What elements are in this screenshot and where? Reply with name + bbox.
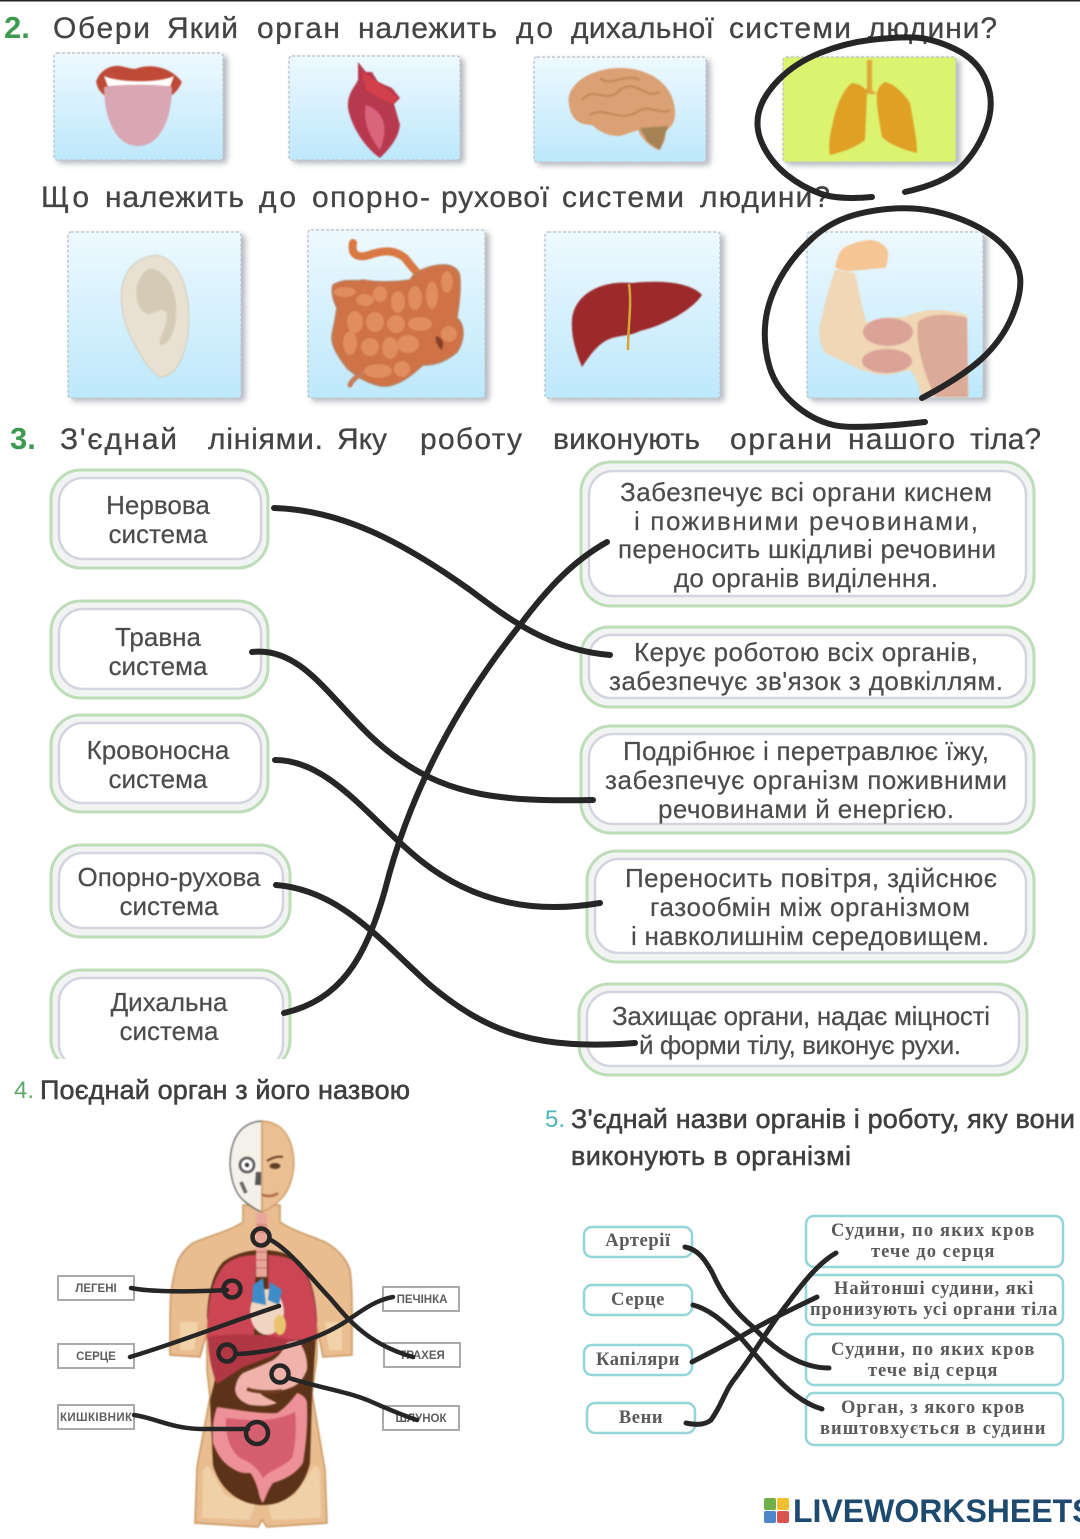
stomach bbox=[235, 1341, 307, 1406]
label: trachea bbox=[384, 1343, 460, 1367]
hip highlight bbox=[202, 1465, 321, 1520]
box: nervous system bbox=[51, 470, 268, 568]
box: nervous function: забезпечує зв'язок з довкіллям. bbox=[609, 666, 1003, 696]
box: heart bbox=[584, 1285, 692, 1315]
box: arteries definition bbox=[806, 1334, 1063, 1385]
hand-drawn matching lines: question 3 bbox=[252, 508, 635, 1045]
heading: question 2: дихальної bbox=[571, 12, 715, 45]
heading: question 2 part 2: рухової bbox=[441, 181, 550, 214]
trachea bbox=[256, 1213, 267, 1277]
box: heart definition: Орган, з якого кров bbox=[841, 1398, 1025, 1418]
heading: question 2: Який bbox=[167, 12, 238, 45]
heading: question 3 bbox=[10, 421, 1041, 456]
box: arteries definition: Судини, по яких кров bbox=[831, 1340, 1035, 1360]
box: nervous system: система bbox=[109, 519, 208, 549]
panel: functions column, question 5 bbox=[806, 1216, 1063, 1445]
heading: question 2 part 2: до bbox=[259, 181, 296, 214]
box: musculoskeletal system: Опорно-рухова bbox=[77, 862, 261, 892]
box: circulation function: Забезпечує всі органи киснем bbox=[620, 477, 992, 507]
box: digestive function: Подрібнює і перетравлює їжу, bbox=[623, 736, 989, 766]
heading: question 2: Обери bbox=[53, 12, 150, 45]
box: circulation function: до органів виділення. bbox=[674, 563, 938, 593]
heading: question 5: 5. bbox=[545, 1106, 565, 1133]
heading: question 3: роботу bbox=[420, 423, 522, 456]
heading: question 2 part 2: опорно- bbox=[312, 181, 430, 214]
box: nervous function: Керує роботою всіх органів, bbox=[634, 637, 978, 667]
box: circulation function bbox=[581, 462, 1034, 606]
card: lungs bbox=[783, 57, 956, 162]
box: veins: Вени bbox=[619, 1408, 663, 1428]
heading: question 4: 4. bbox=[14, 1077, 34, 1104]
box: nervous function bbox=[581, 627, 1034, 707]
box: arteries definition: тече від серця bbox=[868, 1361, 998, 1381]
box: nervous system: Нервова bbox=[106, 490, 210, 520]
label: intestine bbox=[58, 1405, 134, 1429]
heading: question 2: належить bbox=[358, 12, 497, 45]
heading: question 2: 2. bbox=[4, 10, 30, 45]
heading: question 2: системи bbox=[729, 12, 851, 45]
box: digestive function: речовинами й енергією. bbox=[658, 794, 954, 824]
card: tongue bbox=[54, 53, 223, 160]
heading: question 3: З'єднай bbox=[60, 423, 177, 456]
heading: question 2 part 2: системи bbox=[562, 181, 684, 214]
card: liver bbox=[545, 232, 720, 398]
box: circulatory system: система bbox=[109, 764, 208, 794]
hand-drawn lines: question 4 bbox=[130, 1228, 417, 1444]
box: heart definition bbox=[806, 1393, 1063, 1445]
heading: question 2 part 2: належить bbox=[105, 181, 244, 214]
heading: question 5: З'єднай назви органів і роботу, яку вони bbox=[571, 1104, 1075, 1134]
heading: question 3: тіла? bbox=[970, 423, 1041, 456]
label: heart: СЕРЦЕ bbox=[76, 1351, 116, 1363]
body silhouette bbox=[170, 1205, 352, 1527]
box: musculoskeletal system: система bbox=[120, 891, 219, 921]
box: circulatory system bbox=[51, 715, 268, 812]
box: musculoskeletal function bbox=[579, 984, 1027, 1075]
panel: organ cards row 1 bbox=[54, 53, 956, 162]
illustration: human body anatomy bbox=[170, 1121, 352, 1527]
label: liver: ПЕЧІНКА bbox=[397, 1294, 447, 1306]
box: musculoskeletal function: Захищає органи, надає міцності bbox=[612, 1001, 990, 1031]
box: respiratory system: система bbox=[120, 1016, 219, 1046]
logo mark bbox=[764, 1498, 789, 1523]
liver bbox=[208, 1334, 292, 1384]
heading: question 2 part 2 bbox=[41, 181, 830, 214]
box: veins definition: Судини, по яких кров bbox=[831, 1221, 1035, 1241]
body cavity bbox=[207, 1250, 317, 1505]
box: veins bbox=[587, 1403, 695, 1433]
box: respiratory system bbox=[40, 970, 300, 1073]
hand-drawn circle: lungs answer bbox=[757, 37, 991, 198]
heading: question 3: нашого bbox=[848, 423, 955, 456]
label: stomach bbox=[383, 1406, 459, 1430]
box: musculoskeletal system bbox=[51, 845, 290, 937]
heading: question 3: 3. bbox=[10, 421, 36, 456]
heading: question 2 bbox=[4, 10, 997, 45]
box: respiratory system: Дихальна bbox=[111, 987, 228, 1017]
box: capillaries: Капіляри bbox=[596, 1350, 680, 1370]
box: arteries bbox=[584, 1227, 692, 1257]
box: respiratory function: і навколишнім середовищем. bbox=[631, 921, 989, 951]
card: intestines bbox=[308, 230, 485, 398]
label: heart bbox=[58, 1344, 134, 1368]
arm highlights bbox=[180, 1322, 342, 1350]
box: heart definition: виштовхується в судини bbox=[820, 1419, 1046, 1439]
box: veins definition bbox=[806, 1216, 1063, 1267]
label: stomach: ШЛУНОК bbox=[395, 1413, 447, 1425]
hand-drawn matching lines: question 5 bbox=[685, 1247, 836, 1424]
heading: question 2: людини? bbox=[868, 12, 997, 45]
panel: systems column bbox=[40, 470, 300, 1073]
label: trachea: ТРАХЕЯ bbox=[399, 1350, 445, 1362]
heading: question 3: органи bbox=[730, 423, 832, 456]
card: brain bbox=[534, 57, 706, 162]
box: circulation function: і поживними речовинами, bbox=[634, 506, 978, 536]
card: muscle arm bbox=[807, 232, 983, 398]
label: intestine: КИШКІВНИК bbox=[60, 1412, 133, 1424]
box: digestive system: Травна bbox=[115, 622, 202, 652]
box: circulation function: переносить шкідливі речовини bbox=[618, 534, 996, 564]
heading: question 4: Поєднай орган з його назвою bbox=[40, 1075, 410, 1105]
box: respiratory function bbox=[587, 851, 1034, 962]
box: arteries: Артерії bbox=[605, 1231, 671, 1251]
heading: question 2: до bbox=[516, 12, 553, 45]
heading: question 2 part 2: людини? bbox=[700, 181, 830, 214]
box: capillaries bbox=[584, 1345, 692, 1375]
panel: organs column, question 5 bbox=[584, 1227, 695, 1433]
box: respiratory function: газообмін між організмом bbox=[650, 892, 970, 922]
stomach fold bbox=[247, 1389, 282, 1392]
lungs bbox=[207, 1255, 256, 1340]
heading: question 5 bbox=[545, 1104, 1075, 1171]
intestines bbox=[213, 1393, 307, 1503]
box: veins definition: тече до серця bbox=[871, 1242, 995, 1262]
box: circulatory system: Кровоносна bbox=[87, 735, 230, 765]
box: musculoskeletal function: й форми тілу, виконує рухи. bbox=[639, 1030, 961, 1060]
hand-drawn circle: muscle answer bbox=[765, 208, 1020, 427]
label: liver bbox=[383, 1287, 459, 1311]
box: digestive function: забезпечує організм поживними bbox=[605, 765, 1007, 795]
heading: question 3: виконують bbox=[553, 423, 700, 456]
heading: question 2: орган bbox=[257, 12, 340, 45]
box: capillaries definition: Найтонші судини, які bbox=[834, 1279, 1034, 1299]
box: capillaries definition: пронизують усі органи тіла bbox=[810, 1300, 1058, 1320]
box: capillaries definition bbox=[806, 1275, 1063, 1325]
card: heart bbox=[289, 56, 460, 160]
box: respiratory function: Переносить повітря, здійснює bbox=[625, 863, 997, 893]
box: digestive system: система bbox=[109, 651, 208, 681]
label: lungs bbox=[58, 1276, 134, 1300]
heading: question 3: лініями. bbox=[208, 423, 323, 456]
box: digestive function bbox=[581, 726, 1034, 833]
heading: question 5: виконують в організмі bbox=[571, 1141, 851, 1171]
box: digestive system bbox=[51, 601, 268, 698]
head with skull half bbox=[230, 1121, 294, 1212]
box: heart: Серце bbox=[611, 1290, 665, 1310]
panel: functions column bbox=[579, 462, 1034, 1075]
card: ear bbox=[68, 232, 241, 398]
heart bbox=[250, 1278, 286, 1335]
panel: organ cards row 2 bbox=[68, 230, 983, 398]
label: lungs: ЛЕГЕНІ bbox=[75, 1283, 117, 1295]
heading: question 2 part 2: Що bbox=[41, 181, 89, 214]
heading: question 3: Яку bbox=[337, 423, 387, 456]
